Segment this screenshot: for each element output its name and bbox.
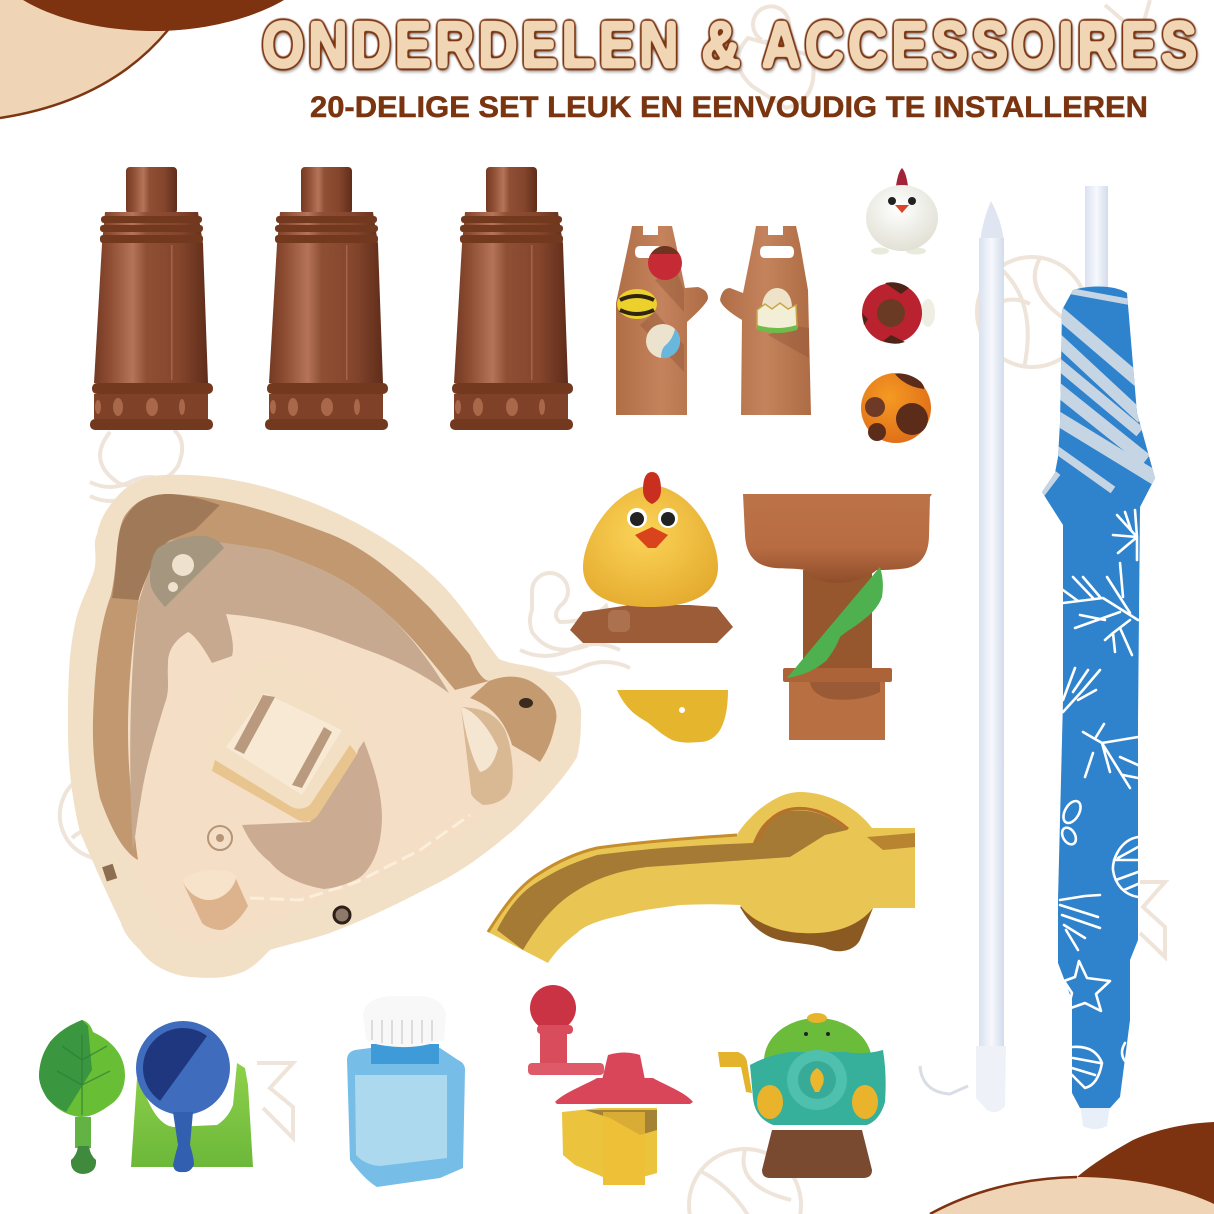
part: bowl tower with green leaf xyxy=(743,494,932,740)
part: ladybug figure xyxy=(862,282,935,344)
part: left plate with bugs xyxy=(616,226,708,415)
part: small yellow cup xyxy=(617,690,728,743)
part: green leaf scoop xyxy=(39,1020,125,1174)
part: brown tower 3 xyxy=(450,167,573,430)
part: brown tower 2 xyxy=(265,167,388,430)
title: ONDERDELEN & ACCESSOIRES xyxy=(262,8,1201,81)
part: yellow chicken on nest xyxy=(570,472,733,643)
part: brown tower 1 xyxy=(90,167,213,430)
part: red crank and yellow wheel xyxy=(528,985,693,1185)
part: bubble liquid bottle xyxy=(347,996,465,1187)
corner decoration: top left xyxy=(0,0,284,118)
part: blue scoop and green holder xyxy=(131,1021,253,1172)
part: white chick figure xyxy=(866,168,938,254)
part: closed blue umbrella xyxy=(1042,186,1160,1129)
part: orange ball xyxy=(861,373,931,443)
subtitle: 20-DELIGE SET LEUK EN EENVOUDIG TE INSTALLEREN xyxy=(310,91,1148,124)
part: green dinosaur on base xyxy=(718,1013,886,1178)
part: right plate with egg xyxy=(720,226,811,415)
corner decoration: bottom right xyxy=(930,1122,1214,1214)
part: large beige base tray xyxy=(68,475,581,978)
part: white pole xyxy=(920,201,1006,1112)
part: yellow slide xyxy=(488,792,915,963)
